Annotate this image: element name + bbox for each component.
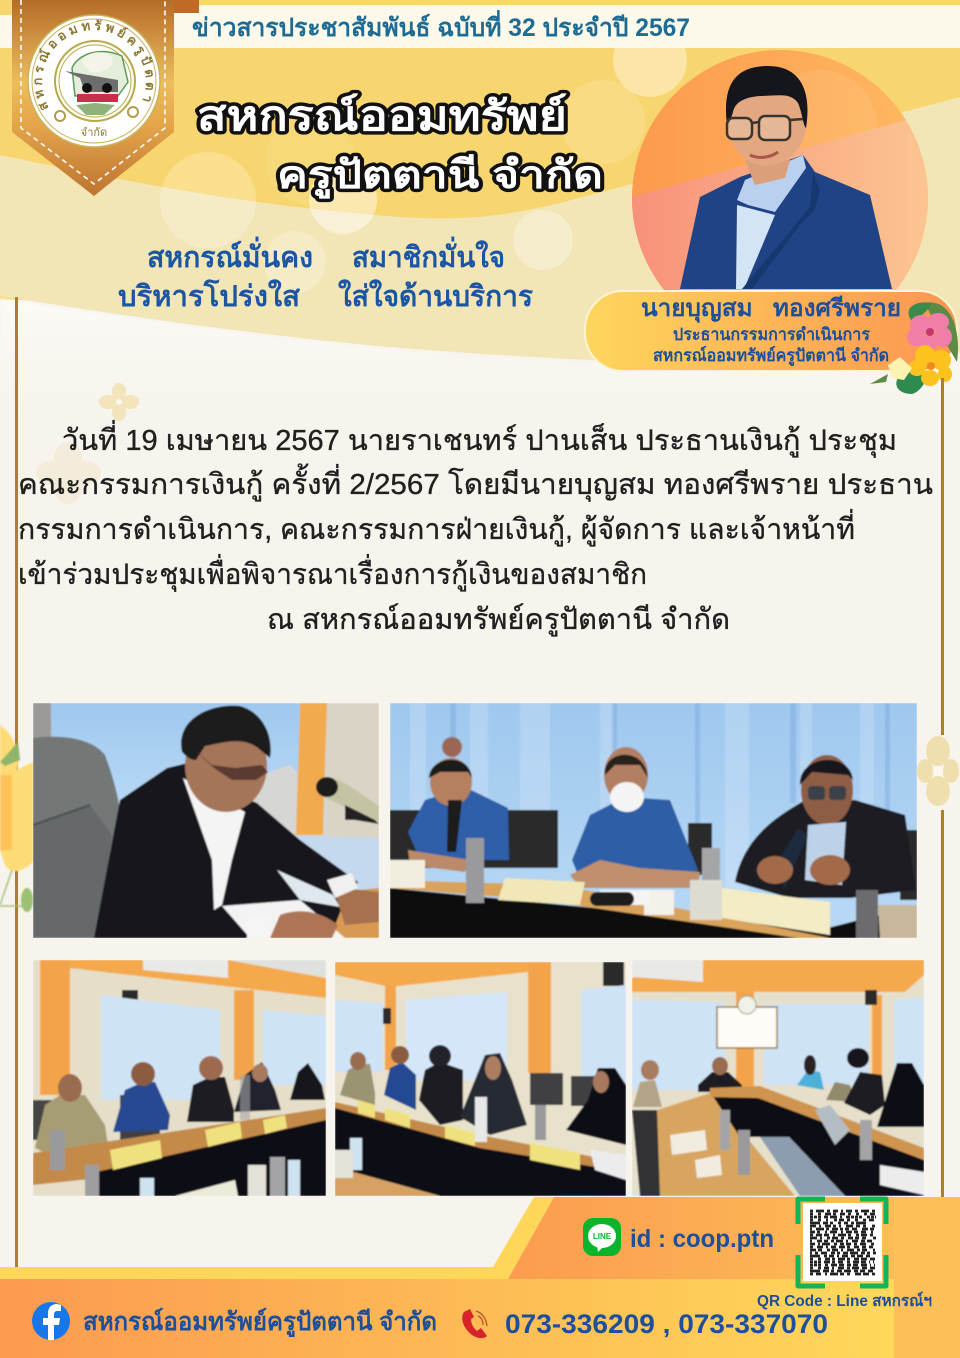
body text: เข้าร่วมประชุมเพื่อพิจารณาเรื่องการกู้เงินของสมาชิก bbox=[18, 554, 647, 592]
chairman name: นายบุญสม ทองศรีพราย bbox=[641, 295, 901, 324]
header background bbox=[0, 0, 960, 420]
frame lines bbox=[15, 297, 944, 1267]
slogan: ใส่ใจด้านบริการ bbox=[338, 279, 533, 313]
title bbox=[197, 93, 603, 199]
title: สหกรณ์ออมทรัพย์ bbox=[197, 93, 567, 139]
slogan: สหกรณ์มั่นคง bbox=[147, 236, 313, 274]
issue heading: ข่าวสารประชาสัมพันธ์ ฉบับที่ 32 ประจำปี 2567 bbox=[192, 10, 690, 42]
icon: phone bbox=[462, 1309, 487, 1338]
shirt bbox=[736, 205, 775, 289]
body text: ณ สหกรณ์ออมทรัพย์ครูปัตตานี จำกัด bbox=[267, 603, 730, 637]
slogan: บริหารโปร่งใส bbox=[118, 278, 300, 313]
icon: LINE bbox=[583, 1218, 621, 1256]
cooperative name: สหกรณ์ออมทรัพย์ครูปัตตานี จำกัด bbox=[653, 345, 889, 367]
photo: committee at table bbox=[390, 703, 917, 938]
ornament: faint flower bbox=[36, 442, 101, 504]
chairman title: ประธานกรรมการดำเนินการ bbox=[673, 325, 871, 344]
slogan: สมาชิกมั่นใจ bbox=[352, 236, 505, 274]
logo banner bbox=[12, 0, 199, 196]
photo: meeting view centre bbox=[335, 962, 626, 1196]
body text: กรรมการดำเนินการ, คณะกรรมการฝ่ายเงินกู้, ผู้จัดการ และเจ้าหน้าที่ bbox=[18, 509, 855, 547]
photo: man writing bbox=[33, 703, 379, 938]
body text: วันที่ 19 เมษายน 2567 นายราเชนทร์ ปานเส็น ประธานเงินกู้ ประชุม bbox=[62, 420, 897, 458]
yellow flower bbox=[0, 725, 33, 912]
name plate bbox=[585, 291, 957, 371]
title: ครูปัตตานี จำกัด bbox=[277, 154, 603, 199]
slogan bbox=[118, 236, 533, 313]
logo seal: จำกัด bbox=[81, 127, 107, 139]
ornament: right flower bbox=[917, 736, 959, 806]
icon: LINE: LINE bbox=[593, 1232, 612, 1241]
photo: meeting view right bbox=[632, 960, 924, 1196]
jacket bbox=[680, 155, 892, 289]
logo seal bbox=[27, 14, 161, 148]
phone numbers: 073-336209 , 073-337070 bbox=[505, 1309, 828, 1339]
body text bbox=[18, 420, 933, 637]
photo: meeting view left bbox=[33, 960, 326, 1196]
neck and head bbox=[745, 160, 790, 185]
Facebook page name: สหกรณ์ออมทรัพย์ครูปัตตานี จำกัด bbox=[83, 1307, 437, 1338]
QR caption: QR Code : Line สหกรณ์ฯ bbox=[757, 1291, 932, 1310]
newsletter ribbon bbox=[0, 5, 960, 48]
QR code bbox=[798, 1199, 886, 1286]
ornament: small flower bbox=[99, 383, 139, 421]
footer background bbox=[0, 1197, 960, 1358]
portrait: chairman bbox=[632, 50, 928, 290]
icon: Facebook bbox=[32, 1302, 70, 1340]
body text: คณะกรรมการเงินกู้ ครั้งที่ 2/2567 โดยมีนายบุญสม ทองศรีพราย ประธาน bbox=[18, 463, 933, 502]
LINE id: id : coop.ptn bbox=[630, 1225, 774, 1253]
icon: tropical flowers bbox=[870, 302, 958, 394]
